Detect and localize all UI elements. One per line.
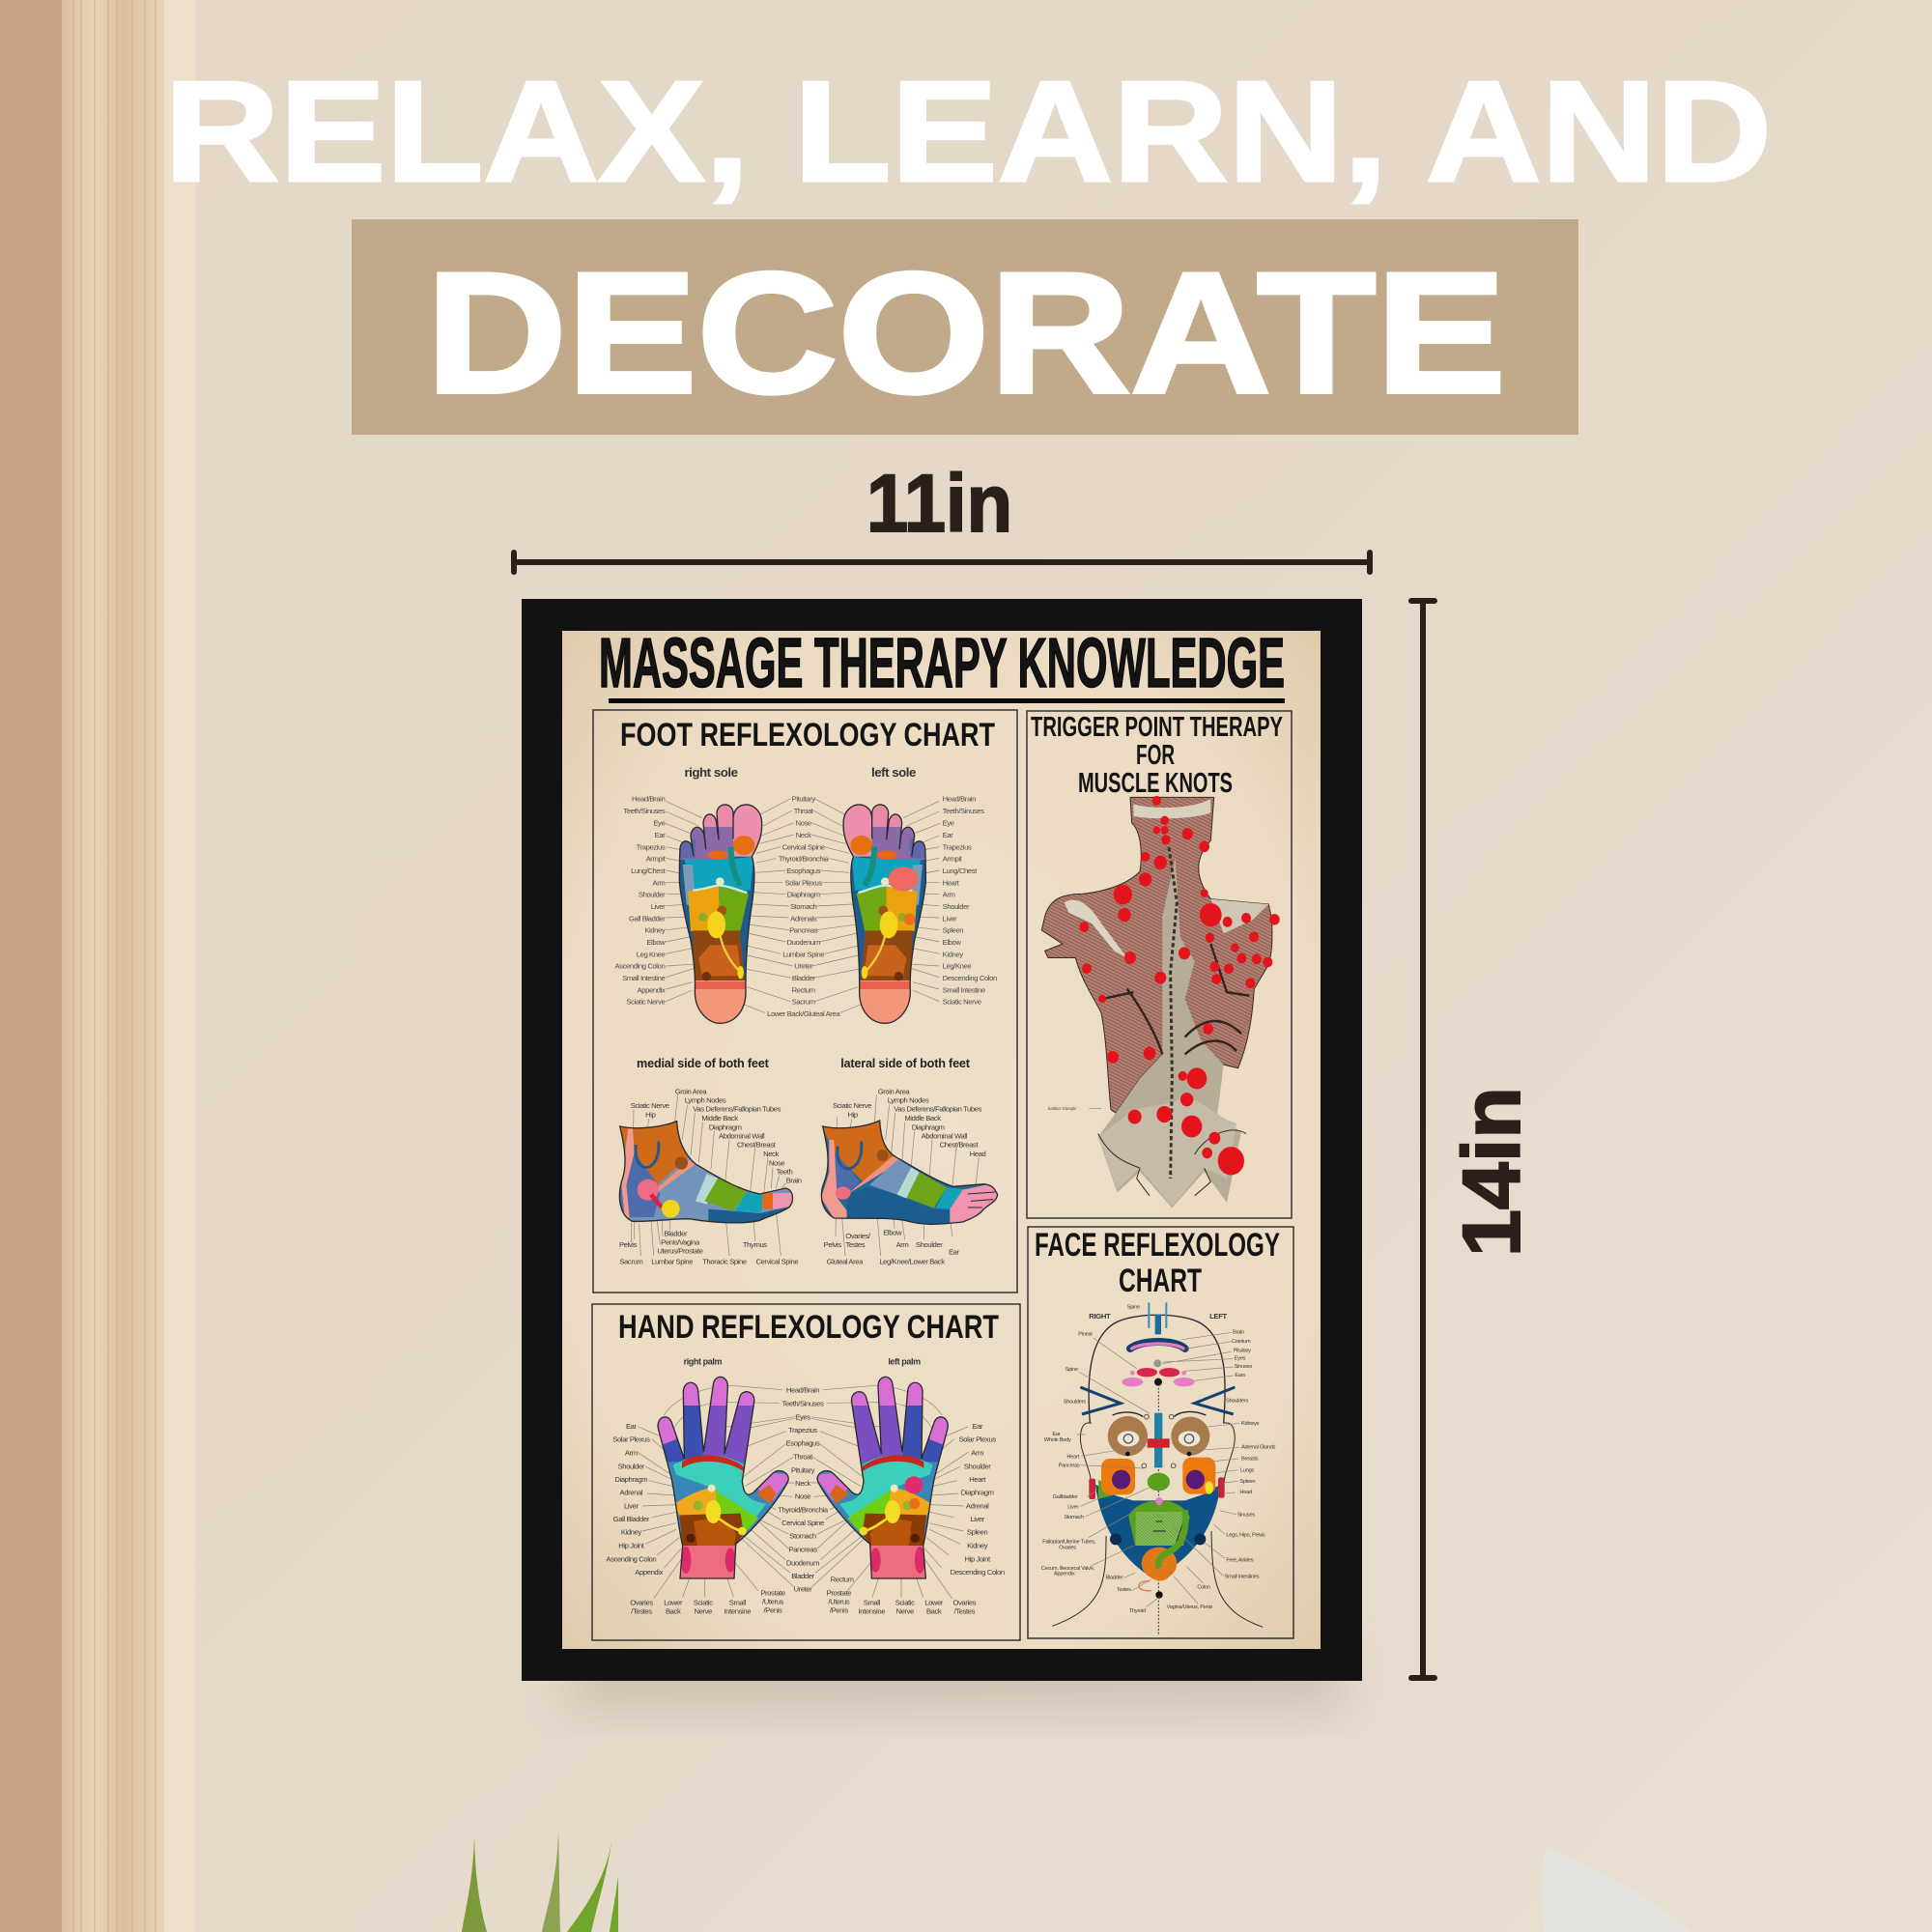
side-of-foot charts: Vas Deferens/Fallopian Tubes — [693, 1105, 781, 1114]
foot heading: FOOT REFLEXOLOGY CHART — [620, 717, 995, 753]
face map: Heart — [1066, 1455, 1080, 1461]
white cushion corner — [1542, 1847, 1690, 1932]
hand charts: /Uterus — [762, 1598, 784, 1606]
face map: Eyes — [1235, 1356, 1246, 1362]
sole charts: Elbow — [646, 938, 666, 947]
face map: Whole Body — [1044, 1437, 1071, 1443]
hand charts: /Penis — [764, 1606, 782, 1615]
hand charts: Rectum — [831, 1576, 854, 1584]
sole charts: Elbow — [943, 938, 961, 947]
face map: Brain — [1233, 1330, 1244, 1336]
side-of-foot charts: Neck — [763, 1150, 779, 1158]
sole charts: Heart — [943, 878, 960, 887]
hand charts: Back — [666, 1607, 681, 1616]
face map: Ear — [1052, 1432, 1061, 1437]
face map: Lungs — [1240, 1467, 1255, 1473]
sole charts: Leg/Knee — [943, 962, 971, 971]
hand charts: Small — [864, 1599, 881, 1607]
hand charts: Nerve — [895, 1607, 914, 1616]
hand charts: Kidney — [967, 1542, 988, 1550]
sole charts: Duodenum — [787, 938, 820, 947]
hand charts: Esophagus — [786, 1439, 820, 1448]
trigger heading: TRIGGER POINT THERAPY — [1031, 712, 1283, 743]
face map: Sinuses — [1235, 1364, 1252, 1370]
sole charts: Lower Back/Gluteal Area — [767, 1009, 840, 1018]
side-of-foot charts: Thoracic Spine — [702, 1257, 747, 1265]
hand charts: Liver — [970, 1515, 985, 1523]
face map: Kidneys — [1241, 1421, 1260, 1427]
side-of-foot charts: Elbow — [883, 1228, 902, 1236]
sole charts: Nose — [796, 819, 811, 828]
hand charts: Heart — [969, 1475, 986, 1484]
hand charts: Throat — [793, 1452, 813, 1461]
side-of-foot charts: Testes — [845, 1240, 866, 1249]
hand charts: Ear — [626, 1422, 638, 1431]
face map: Shoulders — [1226, 1399, 1249, 1405]
face map: Cecum, Illeocecal Valve, — [1041, 1566, 1095, 1572]
side-of-foot charts: medial side of both feet — [637, 1057, 770, 1070]
sole charts: Neck — [796, 831, 811, 839]
sole charts: Leg Knee — [637, 950, 665, 958]
side-of-foot charts: Sciatic Nerve — [631, 1101, 669, 1110]
side-of-foot charts: Brain — [786, 1176, 802, 1184]
hand charts: Spleen — [967, 1528, 988, 1537]
sole charts: Small Intestine — [622, 974, 665, 982]
sole charts: Cervical Spine — [782, 842, 825, 851]
hand charts: Eyes — [795, 1412, 810, 1421]
panel: foot reflexology — [593, 710, 1017, 1293]
sole charts: Armpit — [943, 855, 963, 864]
hand charts: Adrenal — [966, 1501, 989, 1510]
sole charts: Ear — [943, 831, 953, 839]
hand charts: Solar Plexus — [612, 1435, 650, 1444]
hand charts: /Penis — [830, 1606, 848, 1615]
side-of-foot charts: Hip — [645, 1110, 656, 1119]
hand heading: HAND REFLEXOLOGY CHART — [618, 1309, 999, 1346]
trigger heading: FOR — [1136, 740, 1175, 771]
face map: Vagina/Uterus, Penis — [1167, 1605, 1212, 1610]
hand charts: Shoulder — [618, 1462, 645, 1470]
hand charts: Stomach — [789, 1532, 816, 1541]
sole charts: Spleen — [943, 926, 963, 935]
side-of-foot charts: Lumbar Spine — [651, 1257, 693, 1265]
face map: Head — [1239, 1490, 1252, 1495]
face map: Shoulders — [1064, 1399, 1086, 1405]
side-of-foot charts: Pelvis — [824, 1240, 841, 1249]
dimension: height 14in — [1411, 601, 1537, 1678]
sole charts: Head/Brain — [632, 795, 665, 804]
hand charts: Ascending Colon — [606, 1554, 656, 1563]
face map: Pituitary — [1234, 1348, 1251, 1353]
sole charts: Eye — [653, 819, 665, 828]
sole charts: Arm — [652, 878, 665, 887]
face map: Spine — [1127, 1304, 1140, 1310]
side-of-foot charts: Sciatic Nerve — [833, 1101, 871, 1110]
muscle back illustration with trigger points: lumbar triangle — [1048, 1107, 1077, 1112]
sole charts: Lumbar Spine — [782, 950, 824, 958]
sole charts: Kidney — [943, 950, 963, 958]
hand charts: Diaphragm — [614, 1475, 647, 1484]
face map: Testes — [1117, 1587, 1131, 1593]
hand charts: Liver — [624, 1501, 639, 1510]
poster shadow — [570, 1642, 1343, 1710]
hand charts: Ovaries — [630, 1599, 653, 1607]
sole charts: Diaphragm — [787, 891, 820, 899]
trigger heading: MUSCLE KNOTS — [1078, 768, 1233, 799]
hand charts: left palm — [888, 1357, 921, 1367]
face map: Stomach — [1064, 1515, 1084, 1520]
side-of-foot charts: Shoulder — [916, 1240, 943, 1249]
face map: Adrenal Glands — [1241, 1445, 1276, 1451]
hand charts: Hip Joint — [618, 1542, 645, 1550]
side-of-foot charts: Vas Deferens/Fallopian Tubes — [894, 1105, 982, 1114]
face map: Colon — [1197, 1584, 1210, 1590]
sole charts: Sciatic Nerve — [626, 998, 665, 1007]
headline: relax, learn, and: RELAX, LEARN, AND — [164, 52, 1772, 212]
face map: Liver — [1067, 1504, 1079, 1510]
sole charts: Liver — [943, 914, 957, 923]
sole charts: Shoulder — [943, 902, 970, 911]
side-of-foot charts: Gluteal Area — [827, 1257, 864, 1265]
face map: Pineal — [1078, 1331, 1093, 1337]
face map: Thyroid — [1129, 1608, 1146, 1614]
hand charts: Lower — [664, 1599, 683, 1607]
side-of-foot charts: Leg/Knee/Lower Back — [879, 1257, 945, 1265]
hand charts: Ovaries — [953, 1599, 977, 1607]
trigger points — [1079, 796, 1280, 1175]
hand charts: /Uterus — [828, 1598, 850, 1606]
sole charts: Liver — [651, 902, 666, 911]
sole charts: Arm — [943, 891, 955, 899]
side-of-foot charts: Cervical Spine — [755, 1257, 798, 1265]
hand charts: Hip Joint — [965, 1554, 991, 1563]
side-of-foot charts: Chest/Breast — [737, 1141, 777, 1150]
sole charts: Teeth/Sinuses — [623, 807, 666, 815]
face map: LEFT — [1209, 1312, 1228, 1321]
hand charts: Ear — [972, 1422, 983, 1431]
side-of-foot charts: Penis/Vagina — [661, 1237, 700, 1246]
face map — [1041, 1302, 1276, 1634]
hand charts: Small — [729, 1599, 747, 1607]
sole charts: Trapezius — [637, 842, 666, 851]
sole charts: Stomach — [790, 902, 817, 911]
side-of-foot charts: Ovaries/ — [845, 1232, 871, 1240]
sole charts: Adrenals — [790, 914, 817, 923]
side-of-foot charts: Teeth — [777, 1167, 793, 1176]
sole charts: Pituitary — [792, 795, 815, 804]
side-of-foot charts — [611, 1057, 1008, 1265]
hand charts: Head/Brain — [786, 1386, 819, 1395]
sole charts: Solar Plexus — [785, 878, 822, 887]
side-of-foot charts: Hip — [848, 1110, 858, 1119]
side-of-foot charts: Lymph Nodes — [888, 1096, 929, 1105]
sole charts: Bladder — [792, 974, 815, 982]
framed poster — [522, 599, 1362, 1681]
wooden door frame — [0, 0, 195, 1932]
side-of-foot charts: Arm — [896, 1240, 908, 1249]
hand charts: Sciatic — [694, 1599, 713, 1607]
side-of-foot charts: Diaphragm — [709, 1122, 742, 1131]
face map: Small Intestines — [1225, 1575, 1260, 1580]
hand charts: Arm — [971, 1449, 983, 1458]
face heading: CHART — [1119, 1263, 1202, 1299]
dimension: width 11in: 11in — [867, 458, 1012, 549]
side-of-foot charts: Diaphragm — [912, 1122, 945, 1131]
hand charts: Bladder — [791, 1572, 815, 1580]
sole charts: Ascending Colon — [614, 962, 665, 971]
face map: Cranium — [1232, 1339, 1251, 1345]
sole charts: Eye — [943, 819, 954, 828]
side-of-foot charts: Nose — [769, 1158, 784, 1167]
hand charts: Prostate — [760, 1589, 785, 1598]
hand charts: Neck — [795, 1479, 810, 1488]
side-of-foot charts: lateral side of both feet — [840, 1057, 971, 1070]
sole charts: Rectum — [792, 985, 815, 994]
face map: Fallopian/Uterine Tubes, — [1042, 1540, 1096, 1546]
sole charts: Thyroid/Bronchia — [779, 855, 830, 864]
panel: trigger point therapy — [1027, 711, 1292, 1218]
hand charts: Pancreas — [788, 1546, 817, 1554]
face map: Gallbladder — [1053, 1494, 1078, 1500]
side-of-foot charts: Sacrum — [619, 1257, 642, 1265]
side-of-foot charts: Ear — [949, 1247, 960, 1256]
side-of-foot charts: Middle Back — [904, 1114, 941, 1122]
hand charts: Back — [926, 1607, 942, 1616]
hand charts: Thyroid/Bronchia — [778, 1505, 829, 1514]
dimension: height 14in: 14in — [1446, 1087, 1537, 1257]
face map: Appendix — [1054, 1572, 1075, 1577]
side-of-foot charts: Chest/Breast — [940, 1141, 979, 1150]
sole charts: Armpit — [646, 855, 667, 864]
sole charts: Appendix — [638, 985, 666, 994]
sole charts — [614, 765, 997, 1027]
headline banner: decorate: DECORATE — [426, 237, 1506, 429]
face map: Breasts — [1241, 1457, 1259, 1463]
face heading: FACE REFLEXOLOGY — [1035, 1227, 1280, 1264]
poster title — [599, 625, 1285, 703]
face map: Spine — [1065, 1367, 1078, 1373]
sole charts: Teeth/Sinuses — [943, 807, 984, 815]
sole charts: Gall Bladder — [629, 914, 666, 923]
hand charts: Solar Plexus — [959, 1435, 996, 1444]
face map: Feet, Ankles — [1226, 1557, 1254, 1563]
hand charts: Ureter — [794, 1585, 812, 1594]
hand charts: Intensine — [859, 1607, 885, 1616]
side-of-foot charts: Lymph Nodes — [685, 1096, 726, 1105]
headline banner: decorate — [352, 219, 1578, 435]
hand charts: Pituitary — [791, 1465, 815, 1474]
hand charts: right palm — [684, 1357, 722, 1367]
hand charts: /Testes — [954, 1607, 976, 1616]
hand charts: Kidney — [621, 1528, 641, 1537]
sole charts: Throat — [794, 807, 814, 815]
sole charts: left sole — [871, 765, 916, 780]
face map: Bladder — [1106, 1576, 1123, 1581]
hand charts: Gall Bladder — [613, 1515, 650, 1523]
hand charts: Teeth/Sinuses — [782, 1399, 824, 1407]
hand charts: Lower — [924, 1599, 944, 1607]
sole charts: Shoulder — [639, 891, 666, 899]
side-of-foot charts: Head — [970, 1150, 985, 1158]
hand charts: Appendix — [635, 1568, 664, 1577]
hand charts: Intensine — [724, 1607, 751, 1616]
sole charts: Ear — [655, 831, 666, 839]
hand charts: Cervical Spine — [781, 1519, 824, 1527]
sole charts: Lung/Chest — [943, 867, 978, 875]
hand charts: /Testes — [631, 1607, 652, 1616]
sole charts: Sciatic Nerve — [943, 998, 981, 1007]
face heading — [1035, 1227, 1280, 1299]
poster title: MASSAGE THERAPY KNOWLEDGE — [599, 625, 1285, 702]
face map: RIGHT — [1089, 1312, 1111, 1321]
hand charts: Trapezius — [788, 1426, 817, 1435]
sole charts: right sole — [685, 765, 738, 780]
side-of-foot charts: Abdominal Wall — [922, 1131, 968, 1140]
muscle back illustration with trigger points — [1041, 796, 1280, 1208]
hand charts: Prostate — [827, 1589, 851, 1598]
side-of-foot charts: Thymus — [743, 1240, 767, 1249]
sole charts: Ureter — [794, 962, 813, 971]
side-of-foot charts: Abdominal Wall — [719, 1131, 765, 1140]
hand charts: Sciatic — [895, 1599, 915, 1607]
trigger heading — [1031, 712, 1283, 799]
side-of-foot charts: Middle Back — [701, 1114, 738, 1122]
hand charts: Nose — [795, 1492, 810, 1501]
face map: Sinuses — [1237, 1512, 1255, 1518]
hand charts: Descending Colon — [951, 1568, 1005, 1577]
side-of-foot charts: Uterus/Prostate — [657, 1246, 703, 1255]
hand charts: Nerve — [694, 1607, 712, 1616]
side-of-foot charts: Groin Area — [675, 1087, 707, 1095]
hand charts: Arm — [625, 1449, 638, 1458]
face map: Spleen — [1239, 1479, 1255, 1485]
hand charts: Duodenum — [786, 1558, 819, 1567]
hand charts: Diaphragm — [961, 1489, 994, 1497]
sole charts: Esophagus — [786, 867, 821, 875]
side-of-foot charts: Groin Area — [878, 1087, 910, 1095]
sole charts: Descending Colon — [943, 974, 997, 982]
side-of-foot charts: Pelvis — [619, 1240, 638, 1249]
face map: Pancreas — [1059, 1463, 1080, 1469]
sole charts: Pancreas — [789, 926, 818, 935]
sole charts: Small Intestine — [943, 985, 985, 994]
hand charts: Shoulder — [964, 1462, 991, 1470]
dimension: width 11in — [514, 458, 1370, 572]
side-of-foot charts: Bladder — [665, 1229, 688, 1237]
hand charts — [606, 1357, 1005, 1616]
sole charts: Head/Brain — [943, 795, 976, 804]
panel: hand reflexology — [592, 1304, 1020, 1640]
face map: Ears — [1235, 1373, 1245, 1378]
sole charts: Lung/Chest — [631, 867, 667, 875]
panel: face reflexology — [1028, 1227, 1293, 1638]
plant leaves — [462, 1831, 618, 1932]
sole charts: Trapezius — [943, 842, 972, 851]
hand charts: Adrenal — [620, 1489, 643, 1497]
sole charts: Kidney — [644, 926, 666, 935]
sole charts: Sacrum — [792, 998, 815, 1007]
face map: Legs, Hips, Pelvis — [1226, 1532, 1265, 1538]
face map: Ovaries — [1059, 1545, 1076, 1550]
